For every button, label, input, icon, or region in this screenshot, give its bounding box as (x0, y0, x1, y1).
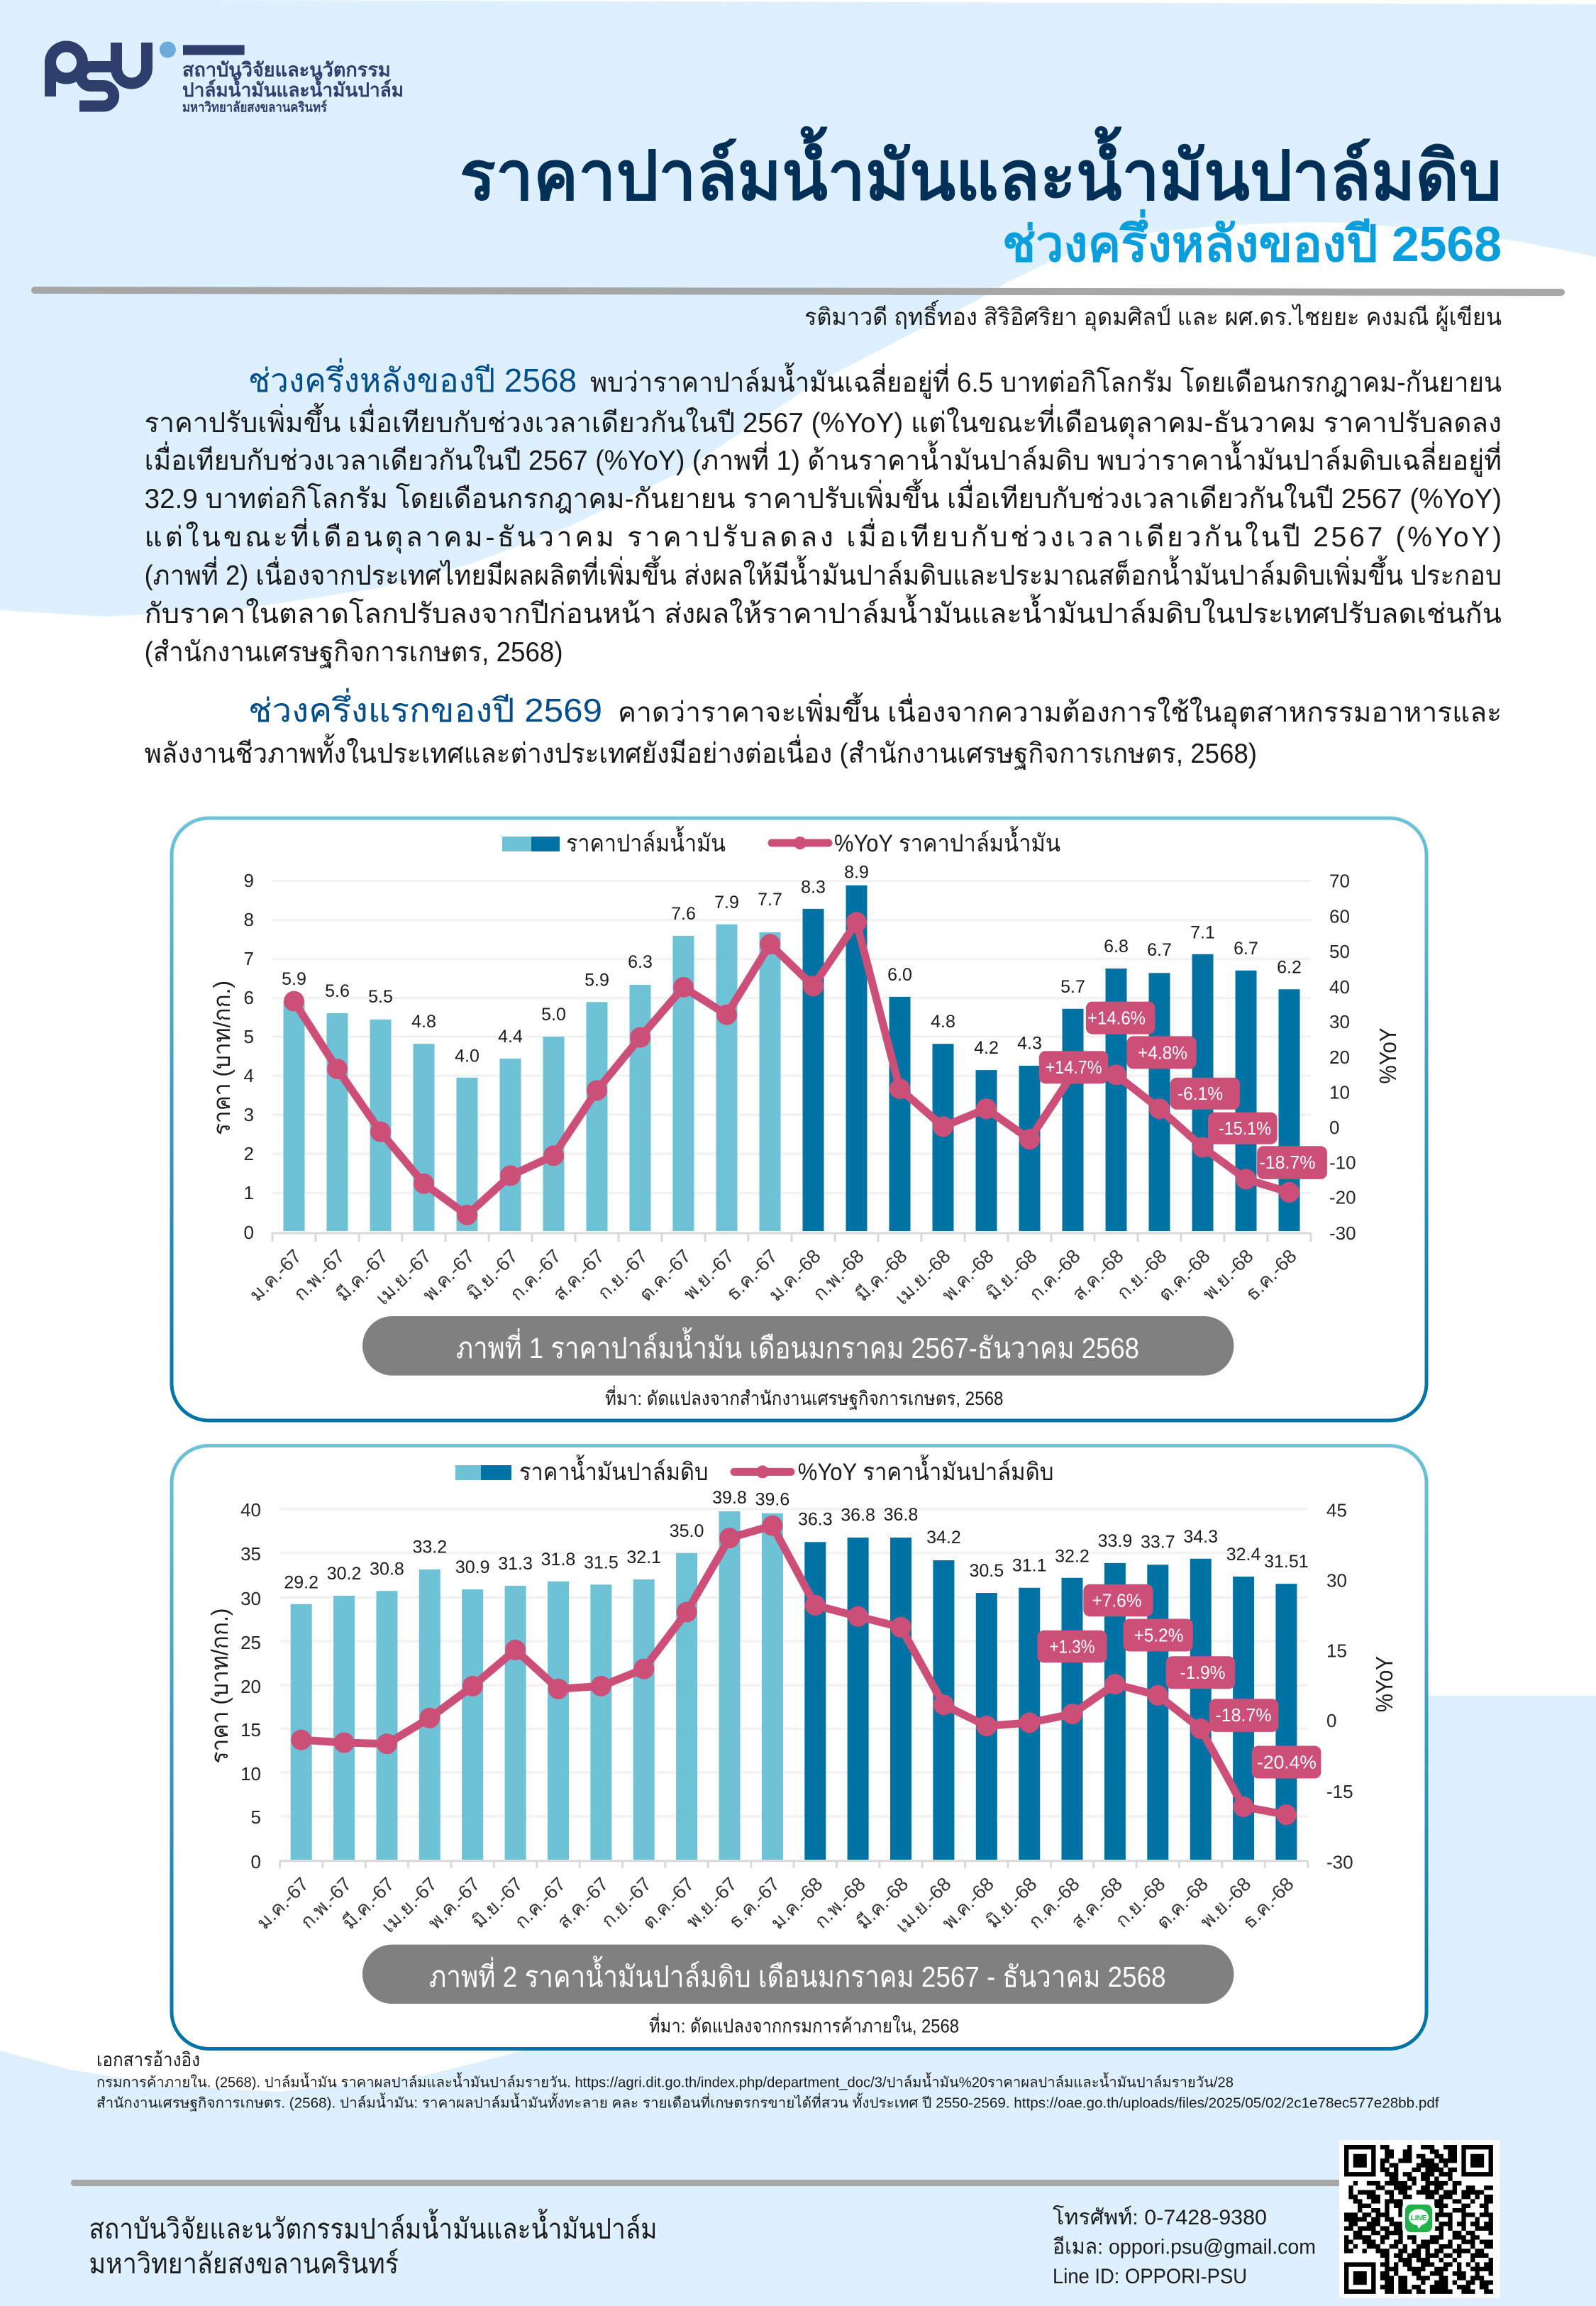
text block: second half 2568: ราคาปรับเพิ่มขึ้น เมื่อเทียบกับช่วงเวลาเดียวกันในปี 2567 (%YoY) แต่ในขณะที่เดือนตุลาคม-ธันวาคม ราคาปรับลดลง (145, 402, 1502, 440)
x axis labels (245, 1245, 1301, 1309)
left axis ticks: 7 (244, 948, 254, 969)
right axis ticks (1329, 871, 1356, 1244)
value labels: 6.0 (887, 965, 912, 985)
footer: contact: อีเมล: oppori.psu@gmail.com (1053, 2236, 1316, 2259)
bar chart: 2568 (804, 1538, 1297, 1860)
right axis ticks: -20 (1329, 1187, 1356, 1208)
footer rule (71, 2180, 1341, 2186)
value labels: 4.3 (1017, 1033, 1042, 1053)
value labels: 31.5 (584, 1552, 619, 1572)
callouts: %YoY: +4.8% (1138, 1042, 1187, 1063)
right axis ticks: -30 (1329, 1223, 1356, 1244)
value labels: 31.3 (498, 1554, 533, 1574)
right axis ticks: 10 (1329, 1082, 1350, 1103)
x axis labels: พ.ค.-67 (419, 1245, 479, 1306)
footer: institute name (89, 2208, 657, 2280)
text block: second half 2568: แต่ในขณะที่เดือนตุลาคม-ธันวาคม ราคาปรับลดลง เมื่อเทียบกับช่วงเวลาเดียวกันในปี 2567 (%YoY) (145, 518, 1502, 554)
value labels: 4.2 (974, 1038, 999, 1058)
left axis ticks: 0 (251, 1851, 261, 1872)
x axis labels: ก.ย.-67 (594, 1245, 652, 1303)
axis title: YoY: %YoY (1375, 1027, 1401, 1084)
value labels: 5.9 (282, 969, 306, 989)
x axis labels: ก.พ.-68 (810, 1873, 870, 1933)
value labels: 4.8 (411, 1012, 436, 1032)
left axis ticks (244, 870, 254, 1243)
value labels: 31.1 (1012, 1555, 1047, 1575)
value labels: 5.0 (541, 1005, 566, 1025)
callouts: %YoY: -18.7% (1260, 1152, 1315, 1173)
x axis labels: ก.ค.-67 (506, 1245, 565, 1305)
caption pill: ภาพที่ 2 ราคาน้ำมันปาล์มดิบ เดือนมกราคม 2567 - ธันวาคม 2568 (429, 1955, 1166, 1993)
x axis labels: ธ.ค.-68 (1238, 1873, 1298, 1933)
x axis labels: พ.ย.-68 (1196, 1873, 1255, 1932)
right axis ticks (1326, 1499, 1353, 1872)
x axis (272, 1233, 1311, 1242)
left axis ticks (240, 1499, 261, 1872)
right axis ticks: 40 (1329, 976, 1350, 998)
right axis ticks: -10 (1329, 1152, 1356, 1173)
left axis ticks: 35 (240, 1543, 261, 1565)
left axis ticks: 8 (244, 909, 254, 930)
value labels: 6.3 (628, 952, 653, 972)
bar chart: 2567 (284, 925, 780, 1231)
value labels: 32.1 (626, 1548, 661, 1567)
text block: second half 2568: 32.9 บาทต่อกิโลกรัม โดยเดือนกรกฎาคม-กันยายน ราคาปรับเพิ่มขึ้น เมื่อเทียบกับช่วงเวลาเดียวกันในปี 2567 (%YoY) (145, 478, 1502, 514)
callouts: %YoY: +7.6% (1092, 1589, 1142, 1611)
x axis labels: มี.ค.-67 (332, 1245, 392, 1306)
x axis labels: ธ.ค.-68 (1241, 1245, 1301, 1305)
text block: second half 2568: เมื่อเทียบกับช่วงเวลาเดียวกันในปี 2567 (%YoY) (ภาพที่ 1) ด้านราคาน้ำมันปาล์มดิบ พบว่าราคาน้ำมันปาล์มดิบเฉลี่ยอยู่ที่ (145, 440, 1502, 477)
right axis ticks: 30 (1329, 1011, 1350, 1032)
value labels (284, 1488, 1309, 1592)
x axis labels: พ.ค.-68 (938, 1245, 998, 1306)
value labels: 33.2 (412, 1537, 447, 1557)
x axis labels: ก.ย.-68 (1113, 1245, 1171, 1303)
caption pill (362, 1316, 1234, 1376)
callouts: %YoY: -6.1% (1177, 1083, 1223, 1104)
x axis labels: ม.ค.-68 (765, 1245, 825, 1306)
right axis ticks: -15 (1326, 1781, 1353, 1802)
x axis labels: พ.ย.-67 (682, 1873, 741, 1932)
legend: ราคาน้ำมันปาล์มดิบ (519, 1455, 708, 1486)
line: %YoY (284, 912, 1299, 1225)
axis title: YoY: %YoY (1371, 1656, 1397, 1712)
x axis labels: ต.ค.-67 (638, 1873, 698, 1933)
x axis labels: ก.พ.-67 (297, 1873, 355, 1933)
left axis ticks: 3 (244, 1104, 254, 1125)
QR code (1339, 2140, 1500, 2298)
bar chart: 2568 (803, 886, 1299, 1231)
panel: chart 1 oil palm price (172, 818, 1426, 1420)
left axis ticks: 15 (240, 1719, 261, 1740)
right axis ticks: 50 (1329, 941, 1350, 962)
x axis labels: ส.ค.-68 (1067, 1873, 1126, 1933)
value labels: 6.2 (1277, 957, 1302, 977)
text block: second half 2568 (145, 358, 1502, 668)
line: %YoY (291, 1516, 1297, 1825)
logo text: ปาล์มน้ำมันและน้ำมันปาล์ม (182, 75, 404, 101)
x axis labels: ส.ค.-68 (1068, 1245, 1128, 1305)
bar chart: 2567 (291, 1511, 783, 1860)
caption pill (362, 1945, 1234, 2004)
legend (455, 1455, 1054, 1486)
footer: contact: โทรศัพท์: 0-7428-9380 (1053, 2205, 1267, 2229)
references: กรมการค้าภายใน. (2568). ปาล์มน้ำมัน ราคาผลปาล์มและน้ำมันปาล์มรายวัน. https://agri.dit.go.th/index.php/department_doc/3/ปาล์มน้ำมัน%20ราคาผลปาล์มและน้ำมันปาล์มรายวัน/28 (96, 2073, 1234, 2091)
left axis ticks: 0 (244, 1222, 254, 1243)
footer: institute name: มหาวิทยาลัยสงขลานครินทร์ (89, 2248, 399, 2280)
value labels: 30.2 (327, 1564, 361, 1584)
value labels: 33.7 (1141, 1533, 1175, 1552)
x axis labels: มี.ค.-68 (852, 1873, 912, 1933)
value labels: 39.8 (712, 1488, 747, 1508)
x axis labels: ก.ย.-67 (597, 1873, 655, 1931)
value labels: 7.6 (671, 904, 696, 924)
x axis labels: พ.ค.-67 (424, 1873, 484, 1933)
callouts: %YoY: -20.4% (1257, 1751, 1317, 1772)
value labels: 4.0 (455, 1046, 480, 1066)
x axis labels: เม.ย.-68 (891, 1245, 955, 1309)
references (96, 2049, 1439, 2112)
x axis labels: ก.ย.-68 (1111, 1873, 1170, 1931)
logo text: สถาบันวิจัยและนวัตกรรม (182, 59, 391, 80)
panel: chart 2 crude palm oil price (172, 1446, 1426, 2049)
left axis ticks: 40 (240, 1499, 261, 1521)
source: ที่มา: ดัดแปลงจากสำนักงานเศรษฐกิจการเกษตร, 2568 (605, 1385, 1003, 1410)
x axis labels: ก.พ.-67 (289, 1245, 349, 1305)
callouts: %YoY: -15.1% (1219, 1118, 1271, 1139)
value labels: 8.3 (801, 877, 826, 897)
value labels: 33.9 (1098, 1531, 1132, 1551)
value labels: 34.3 (1183, 1527, 1218, 1547)
right axis ticks: -30 (1326, 1851, 1353, 1872)
value labels: 6.8 (1104, 937, 1129, 956)
legend: ราคาปาล์มน้ำมัน (566, 826, 726, 857)
value labels: 34.2 (926, 1528, 961, 1548)
x axis labels: ม.ค.-67 (245, 1245, 306, 1306)
logo: PSU institute (50, 41, 404, 116)
left axis ticks: 6 (244, 987, 254, 1008)
x axis labels: ส.ค.-67 (553, 1873, 613, 1933)
x axis labels: เม.ย.-68 (892, 1873, 955, 1937)
right axis ticks: 0 (1326, 1710, 1336, 1731)
value labels: 5.9 (584, 970, 609, 990)
value labels: 5.6 (325, 981, 350, 1001)
x axis labels (253, 1873, 1298, 1937)
footer: contact: Line ID: OPPORI-PSU (1053, 2265, 1247, 2288)
right axis ticks: 30 (1326, 1570, 1347, 1591)
x axis labels: ม.ค.-67 (253, 1873, 313, 1933)
icon: LINE logo (1402, 2202, 1435, 2235)
text block: first half 2569: คาดว่าราคาจะเพิ่มขึ้น เนื่องจากความต้องการใช้ในอุตสาหกรรมอาหารและ (618, 692, 1502, 729)
legend (502, 826, 1060, 857)
axis title: price: ราคา (บาท/กก.) (209, 981, 235, 1135)
value labels: 7.7 (758, 890, 782, 910)
x axis labels: พ.ย.-68 (1199, 1245, 1258, 1304)
authors: รติมาวดี ฤทธิ์ทอง สิริอิศริยา อุดมศิลป์ และ ผศ.ดร.ไชยยะ คงมณี ผู้เขียน (804, 300, 1502, 331)
value labels: 4.8 (931, 1012, 955, 1032)
header rule (35, 290, 1561, 292)
text block: first half 2569: ช่วงครึ่งแรกของปี 2569 (248, 688, 602, 729)
legend: %YoY ราคาปาล์มน้ำมัน (834, 826, 1060, 857)
callouts: %YoY: +14.6% (1087, 1007, 1146, 1028)
x axis labels: มี.ค.-67 (338, 1873, 399, 1933)
value labels: 4.4 (498, 1027, 523, 1047)
value labels: 5.7 (1060, 977, 1085, 997)
source: ที่มา: ดัดแปลงจากกรมการค้าภายใน, 2568 (649, 2013, 959, 2037)
x axis labels: ม.ค.-68 (767, 1873, 827, 1933)
value labels: 30.9 (455, 1557, 490, 1577)
icon: PSU mark (50, 41, 245, 106)
value labels: 7.9 (714, 893, 739, 912)
value labels: 31.8 (541, 1550, 575, 1569)
value labels (282, 863, 1302, 1066)
left axis ticks: 1 (244, 1182, 254, 1203)
x axis labels: เม.ย.-67 (372, 1245, 436, 1309)
value labels: 36.3 (798, 1510, 833, 1530)
value labels: 6.7 (1234, 939, 1258, 959)
value labels: 32.4 (1226, 1545, 1261, 1565)
callouts: %YoY: -18.7% (1216, 1704, 1271, 1726)
x axis labels: ธ.ค.-67 (722, 1245, 782, 1305)
right axis ticks: 0 (1329, 1117, 1339, 1138)
caption pill: ภาพที่ 1 ราคาปาล์มน้ำมัน เดือนมกราคม 2567-ธันวาคม 2568 (456, 1327, 1139, 1364)
left axis ticks: 30 (240, 1588, 261, 1609)
logo text: มหาวิทยาลัยสงขลานครินทร์ (182, 100, 328, 116)
x axis labels: ต.ค.-68 (1152, 1873, 1212, 1933)
axis title: price: ราคา (บาท/กก.) (206, 1608, 233, 1764)
value labels: 30.8 (370, 1559, 404, 1579)
text block: first half 2569 (145, 688, 1502, 770)
left axis ticks: 4 (244, 1065, 254, 1086)
x axis labels: พ.ย.-67 (680, 1245, 738, 1304)
value labels: 5.5 (368, 987, 393, 1007)
left axis ticks: 9 (244, 870, 254, 891)
right axis ticks: 60 (1329, 905, 1350, 927)
x axis labels: ก.ค.-67 (510, 1873, 570, 1933)
callouts: %YoY: +1.3% (1050, 1636, 1095, 1657)
value labels: 29.2 (284, 1572, 318, 1592)
x axis labels: มิ.ย.-67 (463, 1245, 522, 1304)
x axis labels: มิ.ย.-68 (982, 1873, 1041, 1932)
logo text (182, 59, 404, 116)
x axis labels: มิ.ย.-67 (468, 1873, 527, 1932)
references: เอกสารอ้างอิง (96, 2049, 200, 2070)
right axis ticks: 20 (1329, 1047, 1350, 1068)
x axis labels: ก.ค.-68 (1025, 1245, 1085, 1305)
x axis labels: ก.พ.-68 (809, 1245, 868, 1305)
value labels: 31.51 (1264, 1552, 1309, 1572)
x axis labels: มิ.ย.-68 (982, 1245, 1041, 1304)
x axis labels: เม.ย.-67 (377, 1873, 441, 1937)
left axis ticks: 2 (244, 1143, 254, 1164)
left axis ticks: 10 (240, 1763, 261, 1784)
text block: second half 2568: พบว่าราคาปาล์มน้ำมันเฉลี่ยอยู่ที่ 6.5 บาทต่อกิโลกรัม โดยเดือนกรกฎาคม-กันยายน (590, 362, 1502, 399)
text block: first half 2569: พลังงานชีวภาพทั้งในประเทศและต่างประเทศยังมีอย่างต่อเนื่อง (สำนักงานเศรษฐกิจการเกษตร, 2568) (145, 733, 1257, 770)
legend: %YoY ราคาน้ำมันปาล์มดิบ (798, 1455, 1054, 1486)
value labels: 8.9 (844, 863, 869, 883)
value labels: 35.0 (670, 1521, 704, 1541)
x axis labels: ก.ค.-68 (1024, 1873, 1084, 1933)
x axis labels: ต.ค.-68 (1154, 1245, 1214, 1306)
grid (279, 1509, 1308, 1816)
value labels: 36.8 (841, 1506, 875, 1526)
text block: second half 2568: กับราคาในตลาดโลกปรับลงจากปีก่อนหน้า ส่งผลให้ราคาปาล์มน้ำมันและน้ำมันปาล์มดิบในประเทศปรับลดเช่นกัน (145, 593, 1502, 629)
value labels: 30.5 (969, 1561, 1004, 1581)
subtitle: ช่วงครึ่งหลังของปี 2568 (1002, 209, 1502, 272)
x axis labels: พ.ค.-68 (938, 1873, 998, 1933)
value labels: 6.7 (1147, 940, 1172, 960)
x axis labels: ธ.ค.-67 (724, 1873, 784, 1933)
left axis ticks: 20 (240, 1676, 261, 1697)
left axis ticks: 25 (240, 1632, 261, 1653)
x axis labels: ต.ค.-67 (635, 1245, 695, 1306)
references: สำนักงานเศรษฐกิจการเกษตร. (2568). ปาล์มน้ำมัน: ราคาผลปาล์มน้ำมันทั้งทะลาย คละ รายเดือนที่เกษตรกรขายได้ที่สวน ทั้งประเทศ ปี 2550-2569. https://oae.go.th/uploads/files/2025/05/02/2c1e78ec577e28bb.pdf (96, 2093, 1439, 2112)
x axis labels: ส.ค.-67 (549, 1245, 609, 1305)
callouts: %YoY (1039, 1002, 1327, 1179)
callouts: %YoY (1037, 1584, 1321, 1778)
right axis ticks: 45 (1326, 1499, 1347, 1521)
footer: contact (1053, 2205, 1316, 2288)
icon: LINE logo: LINE (1411, 2214, 1427, 2222)
left axis ticks: 5 (251, 1806, 261, 1828)
value labels: 36.8 (884, 1505, 918, 1525)
value labels: 32.2 (1055, 1546, 1090, 1566)
value labels: 7.1 (1190, 922, 1215, 942)
right axis ticks: 15 (1326, 1640, 1347, 1661)
x axis (279, 1861, 1308, 1868)
callouts: %YoY: +14.7% (1046, 1057, 1102, 1078)
title: ราคาปาล์มน้ำมันและน้ำมันปาล์มดิบ (460, 126, 1502, 214)
footer: institute name: สถาบันวิจัยและนวัตกรรมปาล์มน้ำมันและน้ำมันปาล์ม (89, 2208, 657, 2245)
grid (272, 881, 1311, 1193)
callouts: %YoY: +5.2% (1134, 1625, 1183, 1646)
left axis ticks: 5 (244, 1026, 254, 1047)
callouts: %YoY: -1.9% (1180, 1662, 1226, 1683)
text block: second half 2568: ช่วงครึ่งหลังของปี 2568 (248, 358, 577, 399)
value labels: 39.6 (755, 1490, 789, 1510)
x axis labels: มี.ค.-68 (851, 1245, 911, 1306)
right axis ticks: 70 (1329, 871, 1350, 892)
text block: second half 2568: (สำนักงานเศรษฐกิจการเกษตร, 2568) (145, 637, 563, 668)
text block: second half 2568: (ภาพที่ 2) เนื่องจากประเทศไทยมีผลผลิตที่เพิ่มขึ้น ส่งผลให้มีน้ำมันปาล์มดิบและประมาณสต็อกน้ำมันปาล์มดิบเพิ่มขึ้น ประกอบ (145, 555, 1502, 591)
